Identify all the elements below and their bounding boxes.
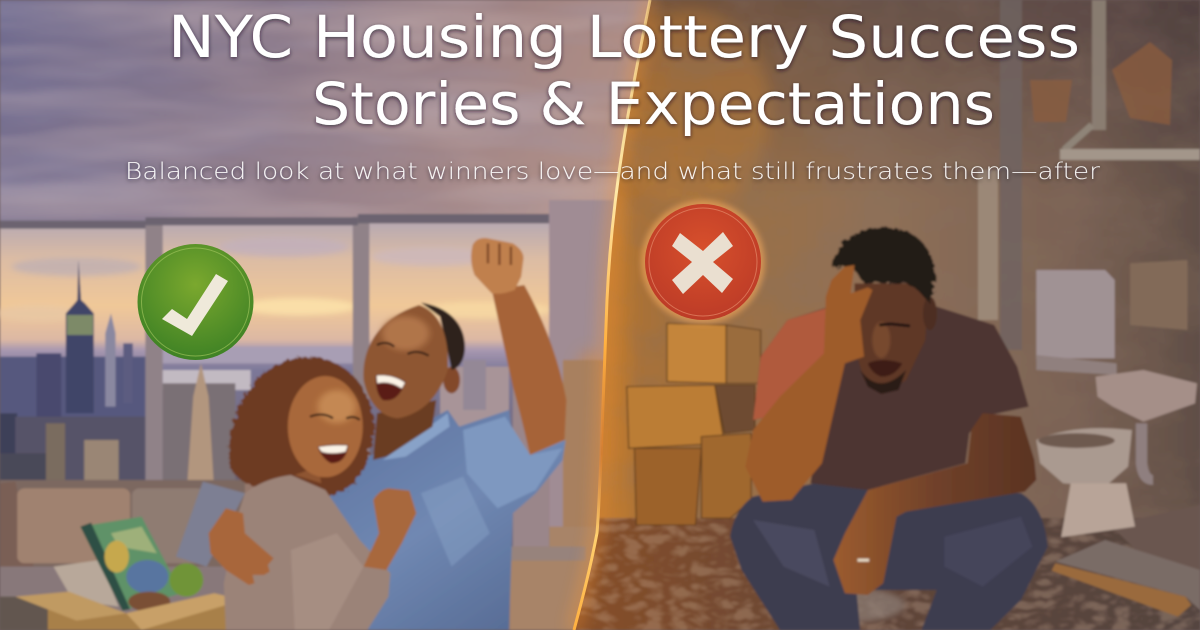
woman's face — [296, 470, 322, 484]
sofa — [0, 480, 245, 630]
man's raised arm and fist — [471, 238, 566, 455]
skyline right — [440, 360, 600, 547]
sky background — [0, 0, 660, 630]
woman laughing — [209, 357, 416, 630]
frustrated man — [730, 227, 1048, 630]
man celebrating — [329, 237, 567, 630]
skyline middle — [163, 347, 353, 480]
wall cistern — [1036, 270, 1117, 375]
woman's hair — [229, 357, 373, 497]
icon: green check badge — [138, 244, 254, 360]
man's head — [832, 227, 937, 394]
man's arm holding head — [745, 265, 872, 502]
title: NYC Housing Lottery Success — [168, 3, 1080, 71]
moving box with book — [15, 517, 243, 630]
electrical box — [1130, 260, 1187, 330]
panel: success side (left) — [0, 0, 660, 630]
woman's sweater — [224, 475, 390, 630]
title: Stories & Expectations — [312, 70, 995, 138]
subtitle: Balanced look at what winners love—and what still frustrates them—after — [125, 159, 1101, 185]
glowing divider line — [574, 0, 650, 630]
toilet — [1036, 428, 1135, 537]
wedding ring — [858, 559, 869, 562]
man's neck and head — [363, 303, 465, 460]
man's jeans — [730, 483, 1048, 630]
man's hand around woman — [209, 508, 274, 585]
title — [168, 3, 1080, 138]
woman's hand — [364, 488, 416, 570]
grimy wall and floor — [560, 0, 1200, 630]
man's t-shirt — [810, 306, 1029, 490]
man's shirt — [329, 410, 567, 630]
window with city view — [0, 200, 600, 561]
broken floorboard — [1052, 540, 1200, 617]
plumbing and fixtures — [1036, 260, 1200, 617]
man's resting arm and hand — [833, 413, 1036, 595]
sink — [1096, 370, 1197, 480]
icon: red X badge — [641, 200, 765, 324]
skyline left — [0, 260, 145, 480]
exposed brick and top pipes — [978, 0, 1200, 350]
stacked cardboard boxes — [627, 323, 761, 525]
panel: frustration side (right) — [560, 0, 1200, 630]
